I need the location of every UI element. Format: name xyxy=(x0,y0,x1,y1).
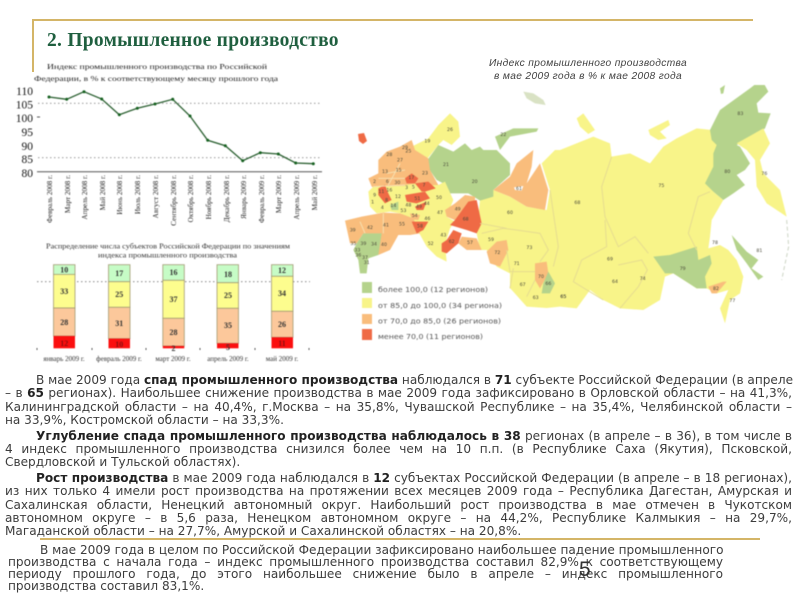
region numbers west and south: 42 xyxy=(367,225,373,231)
region numbers north and centre: 21 xyxy=(443,162,449,168)
region numbers north and centre xyxy=(371,127,522,222)
x axis month labels: Август 2008 г. xyxy=(152,175,160,218)
region numbers north and centre: 12 xyxy=(395,194,401,200)
region numbers east xyxy=(560,111,767,304)
map legend xyxy=(362,282,502,341)
text block: production growth: Магаданской области – на 27,7%, Амурской и Сахалинской областях – на 20,8%. xyxy=(5,524,521,538)
region numbers west and south: 60 xyxy=(507,210,513,216)
y axis labels: 95 xyxy=(22,127,33,139)
region numbers east: 80 xyxy=(724,169,730,175)
green far-east regions xyxy=(705,79,771,200)
bar value labels: 16 xyxy=(170,268,178,277)
bar value labels: 11 xyxy=(278,339,286,348)
bar value labels: 10 xyxy=(115,340,123,349)
map legend: более 100,0 (12 регионов) xyxy=(378,286,488,294)
frame: gold title rule xyxy=(32,19,753,72)
bar 4 xyxy=(217,265,238,348)
region numbers west and south: 65 xyxy=(560,294,566,300)
region numbers west and south: 40 xyxy=(381,242,387,248)
x axis month labels: Март 2009 г. xyxy=(275,175,283,213)
region numbers north and centre: 14 xyxy=(390,203,396,209)
region numbers east: 68 xyxy=(574,200,580,206)
bar value labels: 5 xyxy=(226,343,230,352)
bar value labels: 33 xyxy=(60,287,68,296)
region numbers north and centre: 15 xyxy=(396,167,402,173)
map title: Индекс промышленного производства xyxy=(489,58,687,69)
region numbers west and south: 39 xyxy=(360,241,366,247)
ural and siberian regions xyxy=(350,206,566,301)
region numbers north and centre: 46 xyxy=(424,216,430,222)
region numbers north and centre: 13 xyxy=(382,169,388,175)
region numbers north and centre: 8 xyxy=(385,197,388,203)
y axis labels: 105 xyxy=(16,100,33,112)
y axis labels: 80 xyxy=(22,168,33,180)
kaliningrad exclave xyxy=(358,133,367,144)
region numbers west and south: 66 xyxy=(545,281,551,287)
x axis month labels: Июль 2008 г. xyxy=(134,175,142,214)
region numbers west and south: 39 xyxy=(350,227,356,233)
text block: deepening decline: 4 индекс промышленного производства снизился более чем на 10 п.п. (в Республике Саха (Якутия), Псковской, xyxy=(5,442,792,456)
region numbers west and south xyxy=(350,206,566,301)
map legend: от 70,0 до 85,0 (26 регионов) xyxy=(378,318,501,326)
data line xyxy=(49,92,313,164)
text block: deepening decline: Свердловской и Тульской областях). xyxy=(5,455,240,469)
x axis month labels: Апрель 2009 г. xyxy=(293,175,301,220)
chart title: Федерации, в % к соответствующему месяцу прошлого года xyxy=(34,74,279,83)
x axis labels: апрель 2009 г. xyxy=(207,355,249,363)
region numbers west and south: 47 xyxy=(437,210,443,216)
region numbers west and south: 31 xyxy=(364,260,370,266)
x axis month labels: Май 2009 г. xyxy=(311,175,319,210)
divider: gold rule xyxy=(40,538,760,540)
bar value labels: 18 xyxy=(224,270,232,279)
bar value labels xyxy=(60,266,286,353)
region numbers north and centre: 2 xyxy=(373,179,376,185)
region numbers east: 81 xyxy=(756,248,762,254)
text block: production growth xyxy=(5,471,792,538)
bar value labels: 12 xyxy=(278,266,286,275)
region numbers east: 74 xyxy=(640,276,646,282)
map legend: от 85,0 до 100,0 (34 региона) xyxy=(378,302,502,310)
bar value labels: 12 xyxy=(60,339,68,348)
region numbers north and centre: 16 xyxy=(386,187,392,193)
region numbers north and centre: 29 xyxy=(402,145,408,151)
y axis labels: 100 xyxy=(16,113,33,125)
region numbers west and south: 73 xyxy=(526,245,532,251)
bar value labels: 26 xyxy=(278,320,286,329)
region numbers north and centre: 3 xyxy=(405,185,408,191)
chart title: Распределение числа субъектов Российской Федерации по значениям xyxy=(46,242,290,250)
map: regions of Russia xyxy=(344,84,790,341)
bar value labels: 37 xyxy=(170,295,178,304)
chart title: Индекс промышленного производства по Российской xyxy=(47,62,267,71)
text block: production growth: Сахалинская области, Ненецкий автономный округ. Наибольший рост производства в мае отмечен в Чукотском xyxy=(5,498,792,512)
region numbers east: 79 xyxy=(680,266,686,272)
text block: national summary xyxy=(8,542,723,593)
region numbers west and south: 62 xyxy=(449,239,455,245)
region numbers north and centre: 6 xyxy=(386,179,389,185)
bar value labels: 31 xyxy=(115,319,123,328)
region numbers west and south: 63 xyxy=(533,295,539,301)
eastern regions xyxy=(477,79,789,323)
region numbers east: 75 xyxy=(658,183,664,189)
region numbers north and centre: 51 xyxy=(414,196,420,202)
x axis labels: май 2009 г. xyxy=(266,355,299,363)
x axis labels xyxy=(43,355,299,363)
bar value labels: 34 xyxy=(278,289,286,298)
region numbers north and centre: 26 xyxy=(447,127,453,133)
region numbers west and south: 67 xyxy=(520,282,526,288)
text block: decline in production: В мае 2009 года спад промышленного производства наблюдался в 71 субъекте Российской Федерации (в апреле xyxy=(36,373,793,387)
text block: national summary: производства составил 83,1%. xyxy=(8,579,204,593)
chart title xyxy=(34,62,279,83)
bars xyxy=(54,265,293,348)
region numbers west and south: 58 xyxy=(417,223,423,229)
x axis month labels: Сентябрь 2008 г. xyxy=(170,175,178,226)
region numbers west and south: 41 xyxy=(383,222,389,228)
x axis month labels: Май 2008 г. xyxy=(99,175,107,210)
text block: production growth: Рост производства в мае 2009 года наблюдался в 12 субъектах Российской Федерации (в апреле – в 18 регионах), xyxy=(36,471,792,485)
region numbers north and centre: 22 xyxy=(500,132,506,138)
title: 2. Промышленное производство xyxy=(47,30,339,51)
bar value labels: 2 xyxy=(172,344,176,353)
central and southern regions xyxy=(345,140,482,273)
bar value labels: 25 xyxy=(224,291,232,300)
x axis month labels: Июнь 2008 г. xyxy=(116,175,124,215)
x axis labels: февраль 2009 г. xyxy=(96,355,142,363)
y axis labels: 90 xyxy=(22,141,33,153)
region numbers west and south: 34 xyxy=(371,241,377,247)
x axis month labels: Апрель 2008 г. xyxy=(81,175,89,220)
x axis month labels: Январь 2009 г. xyxy=(240,175,248,219)
region numbers north and centre: 30 xyxy=(394,180,400,186)
text block: decline in production: на 33,9%, Костромской области – на 33,3%. xyxy=(5,413,284,427)
bar value labels: 28 xyxy=(60,318,68,327)
page number: 5 xyxy=(579,558,591,581)
text block: deepening decline: Углубление спада промышленного производства наблюдалось в 38 регионах (в апреле – в 36), в том числе в xyxy=(36,428,792,442)
bar value labels: 28 xyxy=(170,328,178,337)
region numbers west and south: 49 xyxy=(455,206,461,212)
line chart: industrial production index xyxy=(16,62,322,226)
region numbers north and centre: 48 xyxy=(405,202,411,208)
region numbers east: 64 xyxy=(612,279,618,285)
y axis labels: 85 xyxy=(22,154,33,166)
text block: decline in production: Калининградской области – на 40,4%, г.Москва – на 35,8%, Чувашской Республике – на 35,4%, Челябинской области – xyxy=(5,400,792,414)
region numbers west and south: 36 xyxy=(355,252,361,258)
chart title: индекса промышленного производства xyxy=(98,250,238,260)
x axis month labels: Декабрь 2008 г. xyxy=(223,175,231,222)
x axis month labels: Март 2008 г. xyxy=(64,175,72,213)
region numbers north and centre: 53 xyxy=(400,208,406,214)
region numbers north and centre: 11 xyxy=(378,189,384,195)
x axis month labels xyxy=(46,175,319,226)
region numbers east: 69 xyxy=(607,256,613,262)
bar value labels: 35 xyxy=(224,321,232,330)
region numbers west and south: 55 xyxy=(399,221,405,227)
x axis labels: январь 2009 г. xyxy=(43,355,85,363)
region numbers east: 82 xyxy=(713,286,719,292)
region numbers west and south: 57 xyxy=(467,240,473,246)
region numbers north and centre: 1 xyxy=(371,199,374,205)
region numbers north and centre: 4 xyxy=(381,205,384,211)
region numbers north and centre: 25 xyxy=(405,148,411,154)
text block: national summary: производства с начала года – индекс промышленного производства составил 82,9% к соответствующему xyxy=(8,555,723,569)
region numbers west and south: 68 xyxy=(463,216,469,222)
text block: national summary: В мае 2009 года в целом по Российской Федерации зафиксировано наибольшее падение промышленного xyxy=(40,542,723,556)
x axis month labels: Октябрь 2008 г. xyxy=(187,175,195,222)
region numbers east: 65 xyxy=(560,294,566,300)
x axis month labels: Февраль 2008 г. xyxy=(46,175,54,223)
y axis labels: 110 xyxy=(16,86,33,98)
region numbers north and centre: 50 xyxy=(436,195,442,201)
map title xyxy=(489,58,687,82)
region numbers north and centre: 49 xyxy=(416,204,422,210)
region numbers west and south: 70 xyxy=(538,274,544,280)
region numbers east: 78 xyxy=(712,240,718,246)
region numbers west and south: 59 xyxy=(488,237,494,243)
x axis month labels: Ноябрь 2008 г. xyxy=(205,175,213,219)
bar 2 xyxy=(108,265,130,348)
region numbers north and centre: 61 xyxy=(516,186,522,192)
region numbers east: 83 xyxy=(737,111,743,117)
northern and western regions xyxy=(412,92,548,210)
text block: national summary: периоду прошлого года, до этого наибольшее снижение было в апреле – индекс промышленного xyxy=(8,567,723,581)
bar value labels: 17 xyxy=(115,269,123,278)
region numbers north and centre: 19 xyxy=(424,138,430,144)
text block: deepening decline xyxy=(5,428,792,469)
region numbers west and south: 43 xyxy=(440,232,446,238)
region numbers north and centre: 17 xyxy=(408,175,414,181)
bar 1 xyxy=(54,265,75,348)
region numbers north and centre: 20 xyxy=(472,179,478,185)
chart title xyxy=(46,242,290,260)
region numbers west and south: 52 xyxy=(428,241,434,247)
region numbers north and centre: 27 xyxy=(397,157,403,163)
text block: decline in production: – в 65 регионах). Наибольшее снижение производства в мае 2009 года зафиксировано в Орловской области – на 41,3%, xyxy=(5,386,792,400)
region numbers west and south: 33 xyxy=(354,247,360,253)
x axis month labels: Февраль 2009 г. xyxy=(258,175,266,223)
region numbers north and centre: 28 xyxy=(386,152,392,158)
region numbers north and centre: 54 xyxy=(412,213,418,219)
region numbers west and south: 71 xyxy=(514,261,520,267)
text block: production growth: из них только 4 имели рост производства на протяжении всех месяцев 2009 года – Республика Дагестан, Амурская и xyxy=(5,484,792,498)
text block: production growth: автономном округе – в 5,6 раза, Ненецком автономном округе – на 44,2%, Республике Калмыкия – на 29,7%, xyxy=(5,511,792,525)
region numbers east: 76 xyxy=(761,171,767,177)
region numbers north and centre: 5 xyxy=(412,184,415,190)
map title: в мае 2009 года в % к мае 2008 года xyxy=(494,71,682,82)
region numbers north and centre: 23 xyxy=(422,170,428,176)
bar value labels: 25 xyxy=(115,290,123,299)
region numbers west and south: 37 xyxy=(362,255,368,261)
text block: decline in production xyxy=(5,373,793,427)
bar value labels: 10 xyxy=(60,266,68,274)
region numbers north and centre: 44 xyxy=(424,201,430,207)
region numbers north and centre: 9 xyxy=(373,192,376,198)
region numbers east: 77 xyxy=(729,298,735,304)
region numbers north and centre: 7 xyxy=(423,182,426,188)
bar 3 xyxy=(163,265,184,348)
region numbers west and south: 72 xyxy=(494,250,500,256)
map legend: менее 70,0 (11 регионов) xyxy=(378,333,483,341)
x axis labels: март 2009 г. xyxy=(155,355,191,363)
bar 5 xyxy=(272,265,293,348)
y axis labels xyxy=(16,86,33,180)
region numbers west and south: 35 xyxy=(350,241,356,247)
stacked bar chart: regions by index value xyxy=(36,242,310,364)
